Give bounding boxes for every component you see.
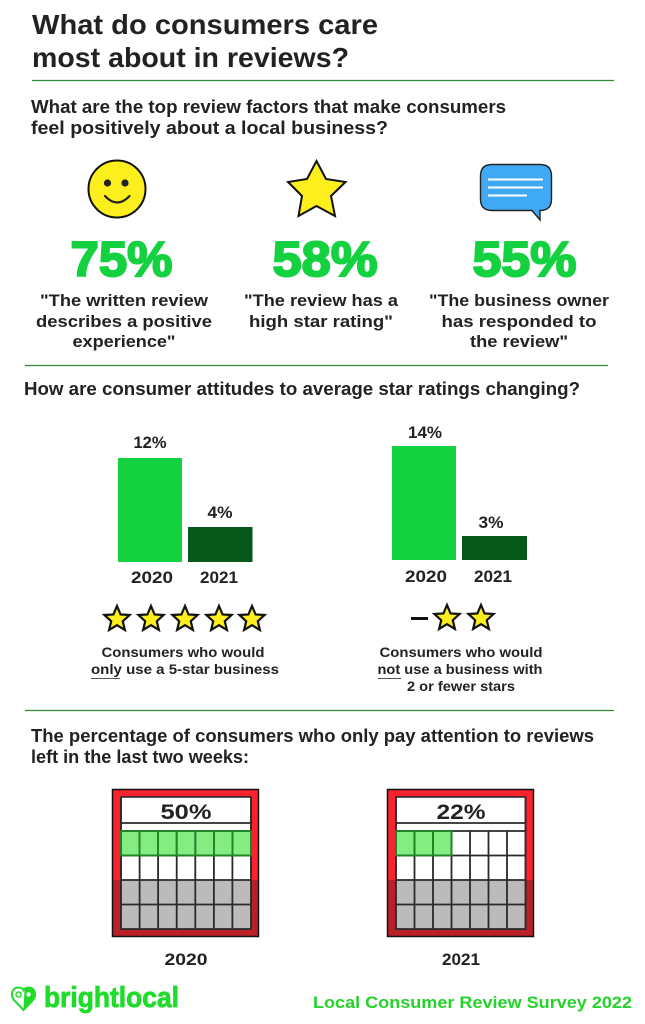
bar chart: not 2 stars or fewer: 3% [478, 514, 504, 532]
quote: owner responded: has responded to [442, 313, 596, 331]
stat: 75%: 75% [70, 233, 172, 287]
calendar value: 22%: 22% [436, 801, 486, 824]
calendar value: 50%: 50% [160, 801, 212, 824]
icon: star [288, 161, 346, 216]
panel: written review factor [36, 160, 212, 351]
quote: positive experience: describes a positive [36, 313, 212, 331]
year label: 2020: 2020 [164, 950, 208, 969]
footer: survey name: Local Consumer Review Survey 2022 [313, 993, 632, 1012]
panel: owner response factor [429, 164, 610, 351]
quote: high star rating: high star rating" [249, 313, 393, 331]
stat: 55%: 55% [472, 233, 576, 287]
panel: star rating factor [244, 161, 399, 331]
icon: five stars [104, 606, 265, 630]
greyed days [121, 880, 251, 929]
title [32, 9, 378, 73]
heading: top review factors: feel positively about a local business? [31, 118, 388, 138]
caption: not 2 stars or fewer: Consumers who would [380, 645, 542, 660]
caption: only 5-star [91, 645, 279, 678]
bar chart: only 5-star: 4% [208, 504, 233, 522]
caption: not 2 stars or fewer [378, 645, 542, 694]
heading: attitudes to star ratings: How are consumer attitudes to average star ratings changing? [24, 379, 580, 399]
icon: dash and two stars [411, 605, 494, 629]
bar chart: not 2 stars or fewer: 2021 [474, 568, 512, 586]
caption: only 5-star: only use a 5-star business [91, 662, 279, 677]
panel: 5-star only chart [91, 434, 279, 678]
wordmark: brightlocal [44, 982, 179, 1014]
quote: owner responded: "The business owner [429, 292, 610, 310]
heading: top review factors [31, 97, 506, 138]
greyed days [396, 880, 526, 929]
bar chart: only 5-star: 2020 [131, 569, 173, 587]
heading: last two weeks: left in the last two weeks: [31, 747, 249, 767]
quote: positive experience: "The written review [40, 292, 208, 310]
caption: not 2 stars or fewer: not use a business with [378, 662, 542, 677]
heading: top review factors: What are the top review factors that make consumers [31, 97, 506, 117]
title: What do consumers care [32, 9, 378, 40]
heading: last two weeks: The percentage of consumers who only pay attention to reviews [31, 726, 594, 746]
year label: 2021: 2021 [442, 950, 480, 969]
bar chart: only 5-star: 2021 [200, 569, 238, 587]
icon: heart pin [12, 987, 35, 1010]
quote: owner responded [429, 292, 610, 351]
bar chart: not 2 stars or fewer [392, 424, 527, 586]
panel: 2 or fewer stars chart [378, 424, 542, 694]
quote: high star rating [244, 292, 399, 331]
icon: speech bubble [480, 164, 552, 220]
highlighted days [396, 831, 452, 856]
logo: brightlocal [12, 982, 179, 1014]
bar chart: only 5-star [118, 434, 252, 587]
stat: 58%: 58% [272, 233, 378, 287]
quote: owner responded: the review" [470, 333, 568, 351]
icon: smiley [88, 160, 146, 218]
quote: positive experience [36, 292, 212, 351]
quote: positive experience: experience" [72, 333, 176, 351]
panel: 2020 calendar [112, 790, 258, 969]
caption: only 5-star: Consumers who would [102, 645, 264, 660]
caption: not 2 stars or fewer: 2 or fewer stars [407, 679, 515, 694]
bar chart: only 5-star: 12% [134, 434, 167, 452]
highlighted days [121, 831, 251, 856]
calendar frame [388, 790, 534, 936]
quote: high star rating: "The review has a [244, 292, 399, 310]
heading: last two weeks [31, 726, 594, 767]
calendar frame [112, 790, 258, 936]
bar chart: not 2 stars or fewer: 14% [408, 424, 442, 442]
title: most about in reviews? [32, 42, 349, 73]
bar chart: not 2 stars or fewer: 2020 [405, 568, 447, 586]
panel: 2021 calendar [388, 790, 534, 969]
